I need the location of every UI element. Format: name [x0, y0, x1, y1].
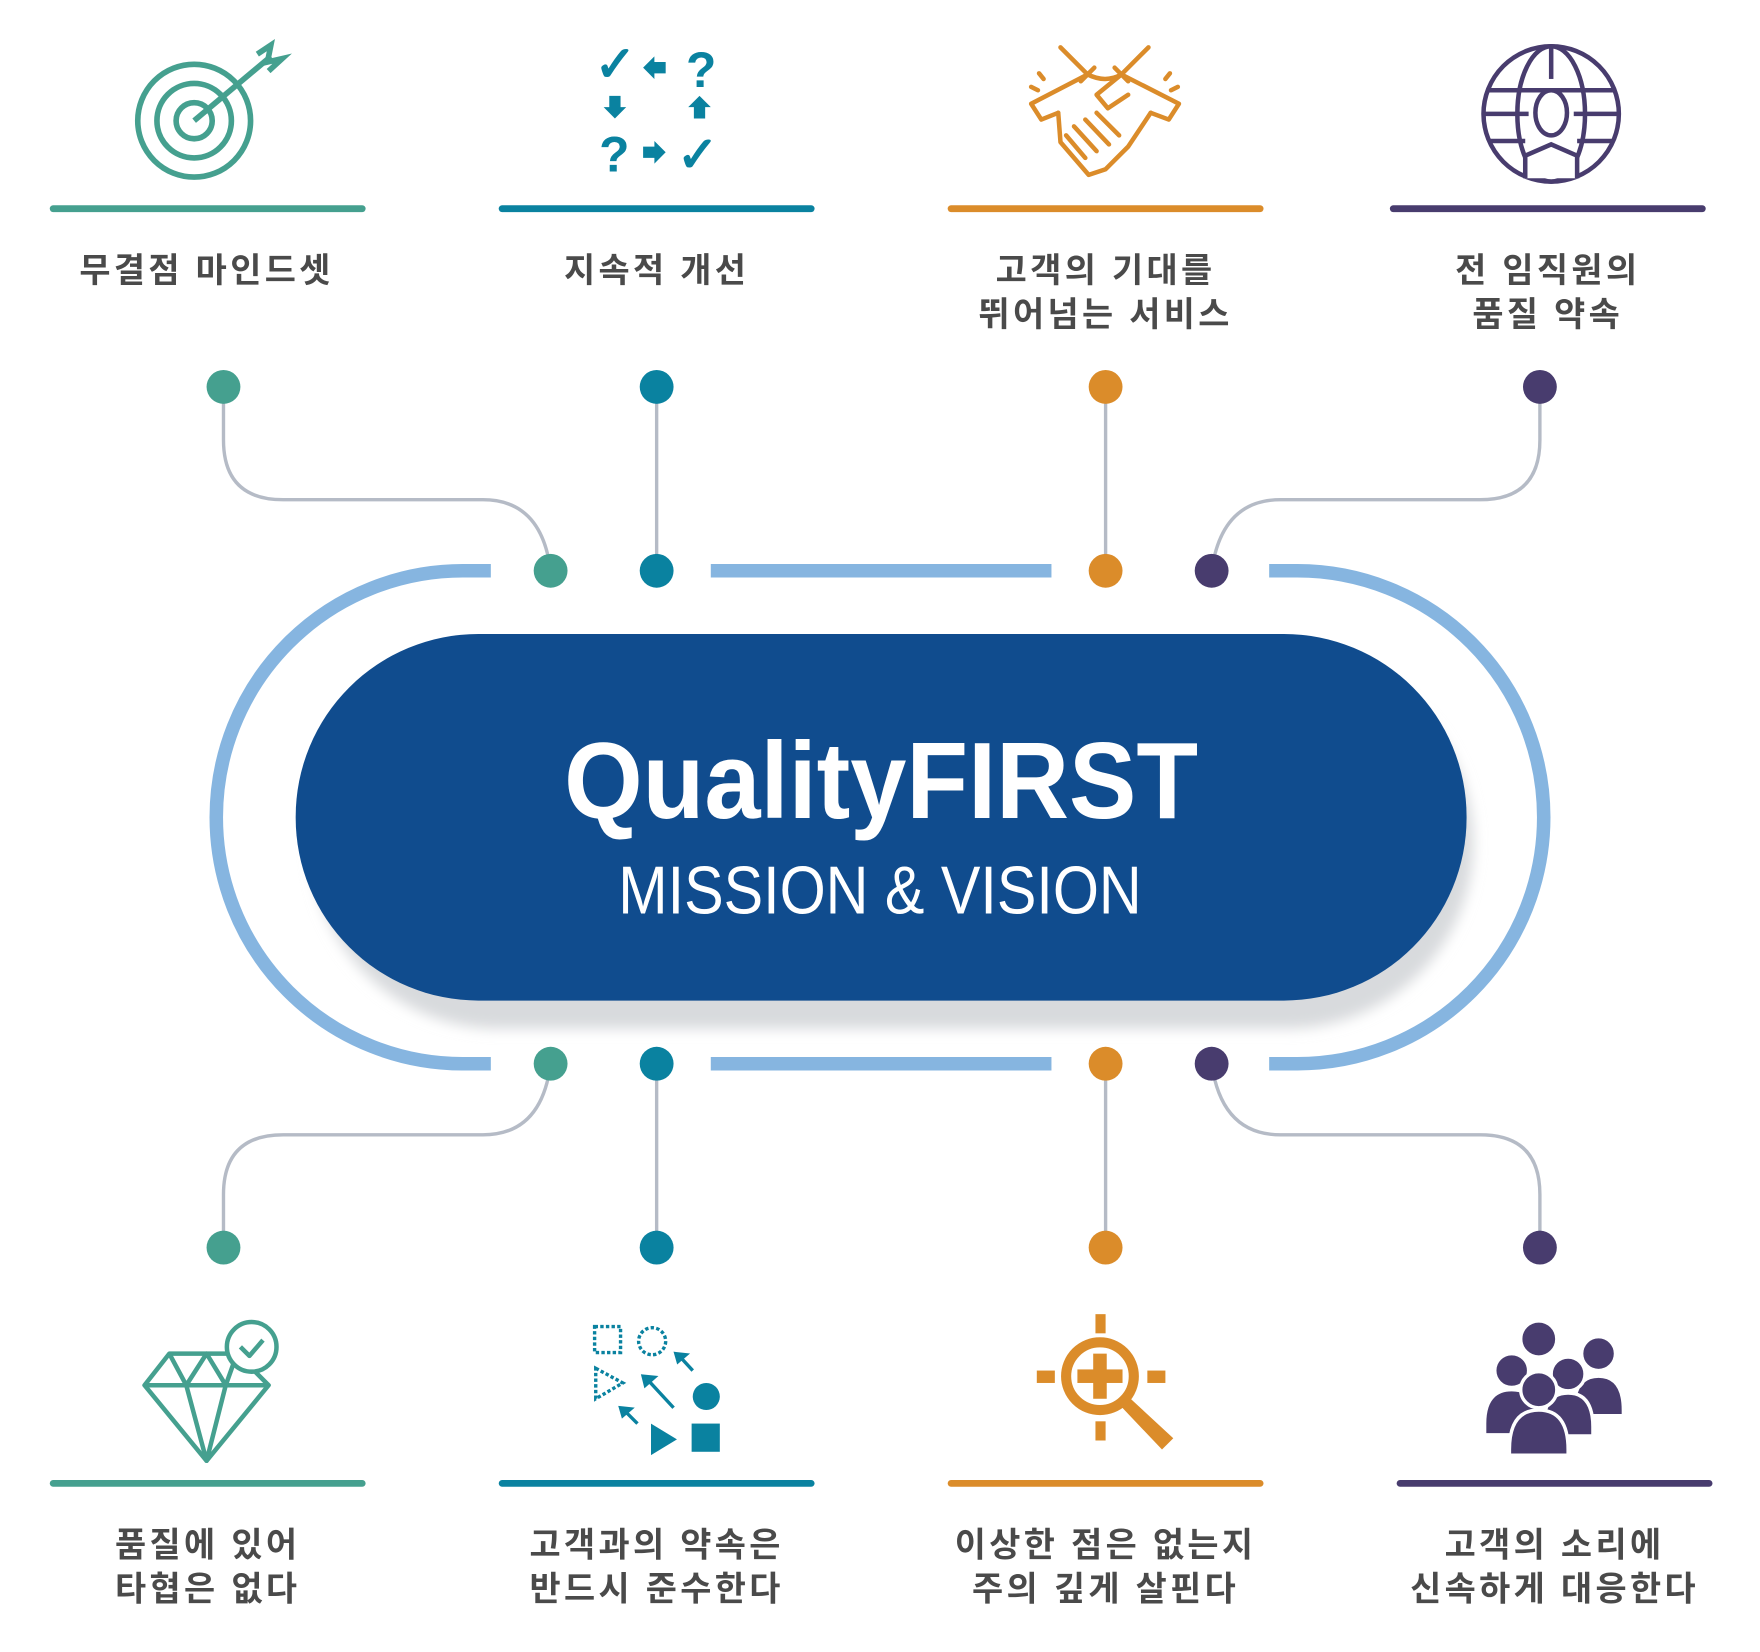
labels: top: 뛰어넘는 서비스 — [978, 296, 1233, 334]
icon: improvement cycle: ✓ — [677, 126, 719, 182]
labels: bottom: 신속하게 대응한다 — [1410, 1571, 1699, 1609]
icon: improvement cycle: ? — [686, 42, 716, 98]
labels: bottom: 타협은 없다 — [115, 1571, 300, 1609]
icon: improvement cycle: ? — [599, 126, 629, 182]
icon: diamond — [145, 1322, 277, 1461]
labels: top — [79, 252, 1640, 334]
dots — [207, 370, 1557, 1265]
center pill — [296, 634, 1473, 1029]
icon: improvement cycle: ✓ — [595, 36, 636, 92]
labels: bottom: 고객의 소리에 — [1445, 1527, 1664, 1565]
icon: globe person — [1483, 46, 1619, 182]
icon: handshake — [1031, 47, 1179, 175]
labels: bottom: 고객과의 약속은 — [529, 1527, 784, 1565]
labels: top: 고객의 기대를 — [996, 252, 1216, 290]
icon: magnifier — [1037, 1314, 1173, 1450]
connectors — [223, 387, 1540, 1248]
subtitle: MISSION & VISION — [618, 854, 1142, 929]
labels: bottom: 주의 깊게 살핀다 — [972, 1571, 1239, 1609]
labels: bottom: 반드시 준수한다 — [529, 1571, 784, 1609]
icon: improvement cycle — [595, 36, 719, 182]
icon: group — [1485, 1321, 1623, 1455]
title: QualityFIRST — [564, 720, 1198, 841]
labels: bottom — [115, 1527, 1699, 1609]
labels: top: 전 임직원의 — [1455, 252, 1640, 290]
labels: top: 무결점 마인드셋 — [79, 252, 334, 290]
labels: top: 품질 약속 — [1472, 296, 1623, 334]
labels: top: 지속적 개선 — [564, 252, 749, 290]
labels: bottom: 품질에 있어 — [115, 1527, 300, 1565]
icon: shapes — [595, 1327, 720, 1455]
icon: target — [138, 45, 282, 177]
labels: bottom: 이상한 점은 없는지 — [955, 1527, 1256, 1565]
track: light blue ring — [216, 571, 1544, 1064]
colored bars — [53, 209, 1709, 1483]
